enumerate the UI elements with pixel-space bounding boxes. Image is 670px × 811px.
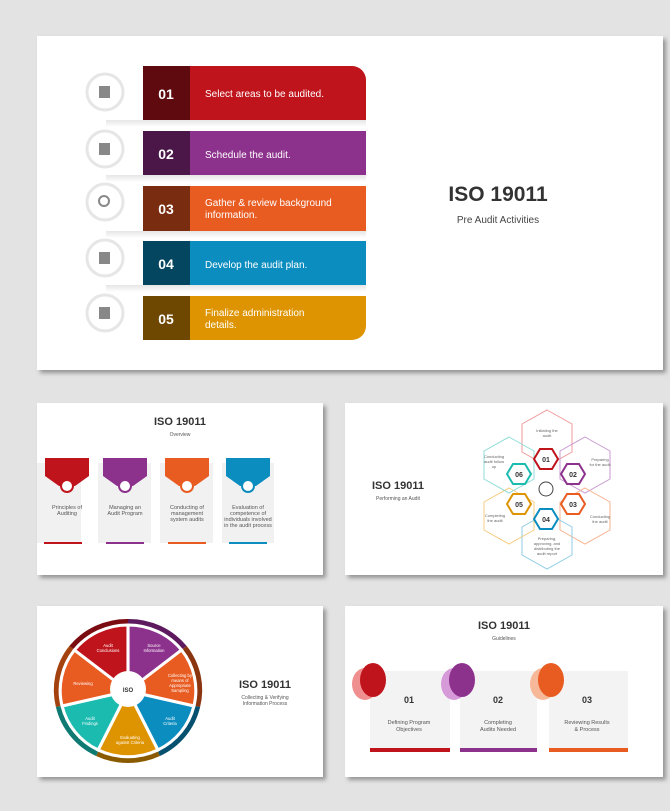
panel: collecting and verifying: Audit: [165, 716, 176, 721]
panel: overview slide: Auditing: [57, 511, 77, 517]
panel: collecting and verifying: Collecting & Verifying: [241, 695, 289, 701]
panel: overview slide: Managing an: [109, 505, 141, 511]
step 02: Schedule the audit.: [205, 150, 291, 161]
panel: overview slide: in the audit process: [224, 523, 272, 529]
panel: overview slide: [37, 403, 323, 575]
panel: guidelines: 03: [582, 695, 592, 705]
panel: collecting and verifying: ISO: [123, 688, 133, 694]
subtitle: Pre Audit Activities: [457, 215, 539, 226]
panel: performing an audit: audit follow: [484, 459, 504, 464]
panel: performing an audit: 05: [515, 502, 523, 509]
title: ISO 19011: [448, 183, 548, 206]
panel: collecting and verifying: Audit: [85, 716, 96, 721]
panel: collecting and verifying: means of: [171, 678, 189, 683]
panel: performing an audit: 01: [542, 457, 550, 464]
panel: performing an audit: 06: [515, 472, 523, 479]
panel: guidelines: Objectives: [396, 727, 422, 733]
step 03: Gather & review background: [205, 198, 332, 209]
step 04: Develop the audit plan.: [205, 260, 307, 271]
panel: collecting and verifying: ISO 19011: [239, 679, 291, 691]
step 04: 04: [158, 256, 174, 272]
panel: performing an audit: [345, 403, 663, 575]
panel: collecting and verifying: Reviewing: [73, 681, 93, 686]
panel: collecting and verifying: Findings: [82, 721, 98, 726]
step 02: [87, 131, 366, 175]
panel: overview slide: Evaluation of: [232, 505, 264, 511]
step 05: details.: [205, 320, 237, 331]
step 02: 02: [158, 146, 174, 162]
panel: guidelines: Guidelines: [492, 636, 516, 642]
step 01: Select areas to be audited.: [205, 89, 324, 100]
panel: collecting and verifying: Criteria: [163, 721, 177, 726]
panel: guidelines: Defining Program: [388, 720, 431, 726]
panel: performing an audit: Performing an Audit: [376, 496, 421, 502]
panel: collecting and verifying: [37, 606, 323, 777]
panel: performing an audit: 02: [569, 472, 577, 479]
panel: guidelines: ISO 19011: [478, 620, 530, 632]
panel: performing an audit: Completing: [485, 513, 505, 518]
panel: performing an audit: up: [492, 464, 497, 469]
step 01: [87, 66, 366, 120]
panel: collecting and verifying: against Criteria: [116, 740, 145, 745]
panel: main slide pre audit activities: [37, 36, 663, 370]
panel: guidelines: [345, 606, 663, 777]
panel: overview slide: ISO 19011: [154, 416, 206, 428]
step 05: Finalize administration: [205, 308, 304, 319]
panel: overview slide: individuals involved: [224, 517, 272, 523]
panel: performing an audit: for the audit: [589, 462, 611, 467]
step 03: information.: [205, 210, 257, 221]
panel: performing an audit: Conducting: [484, 454, 504, 459]
panel: collecting and verifying: Information Process: [243, 701, 288, 707]
step 05: 05: [158, 311, 174, 327]
panel: performing an audit: the audit: [487, 518, 504, 523]
panel: performing an audit: approving, and: [534, 541, 560, 546]
panel: guidelines: & Process: [574, 727, 600, 733]
panel: performing an audit: audit: [543, 433, 552, 438]
step 05: [87, 295, 366, 340]
panel: collecting and verifying: Sampling: [171, 688, 189, 693]
panel: overview slide: Conducting of: [170, 505, 204, 511]
panel: performing an audit: Preparing: [591, 457, 609, 462]
panel: collecting and verifying: Source: [147, 643, 161, 648]
panel: overview slide: Principles of: [52, 505, 82, 511]
step 04: [87, 240, 366, 285]
panel: collecting and verifying: Audit: [103, 643, 114, 648]
panel: guidelines: 01: [404, 695, 414, 705]
panel: collecting and verifying: Information: [144, 648, 165, 653]
panel: performing an audit: Preparing,: [538, 536, 556, 541]
panel: overview slide: Overview: [170, 432, 191, 438]
panel: overview slide: competence of: [230, 511, 267, 517]
panel: performing an audit: distributing the: [534, 546, 561, 551]
panel: performing an audit: Conducting: [590, 514, 610, 519]
panel: performing an audit: ISO 19011: [372, 480, 424, 492]
panel: performing an audit: 03: [569, 502, 577, 509]
panel: overview slide: management: [171, 511, 204, 517]
panel: collecting and verifying: Appropriate: [169, 683, 191, 688]
step 03: [87, 184, 366, 231]
panel: performing an audit: Initiating the: [536, 428, 559, 433]
panel: overview slide: Audit Program: [107, 511, 143, 517]
step 01: 01: [158, 86, 174, 102]
panel: collecting and verifying: Collecting by: [168, 673, 193, 678]
panel: guidelines: Audits Needed: [480, 727, 516, 733]
panel: overview slide: system audits: [170, 517, 204, 523]
panel: guidelines: Reviewing Results: [564, 720, 610, 726]
panel: collecting and verifying: Evaluating: [120, 735, 140, 740]
panel: performing an audit: 04: [542, 517, 550, 524]
panel: guidelines: Completing: [484, 720, 512, 726]
panel: performing an audit: the audit: [592, 519, 609, 524]
panel: guidelines: 02: [493, 695, 503, 705]
panel: collecting and verifying: Conclusions: [97, 648, 119, 653]
step 03: 03: [158, 201, 174, 217]
panel: performing an audit: audit report: [537, 551, 558, 556]
